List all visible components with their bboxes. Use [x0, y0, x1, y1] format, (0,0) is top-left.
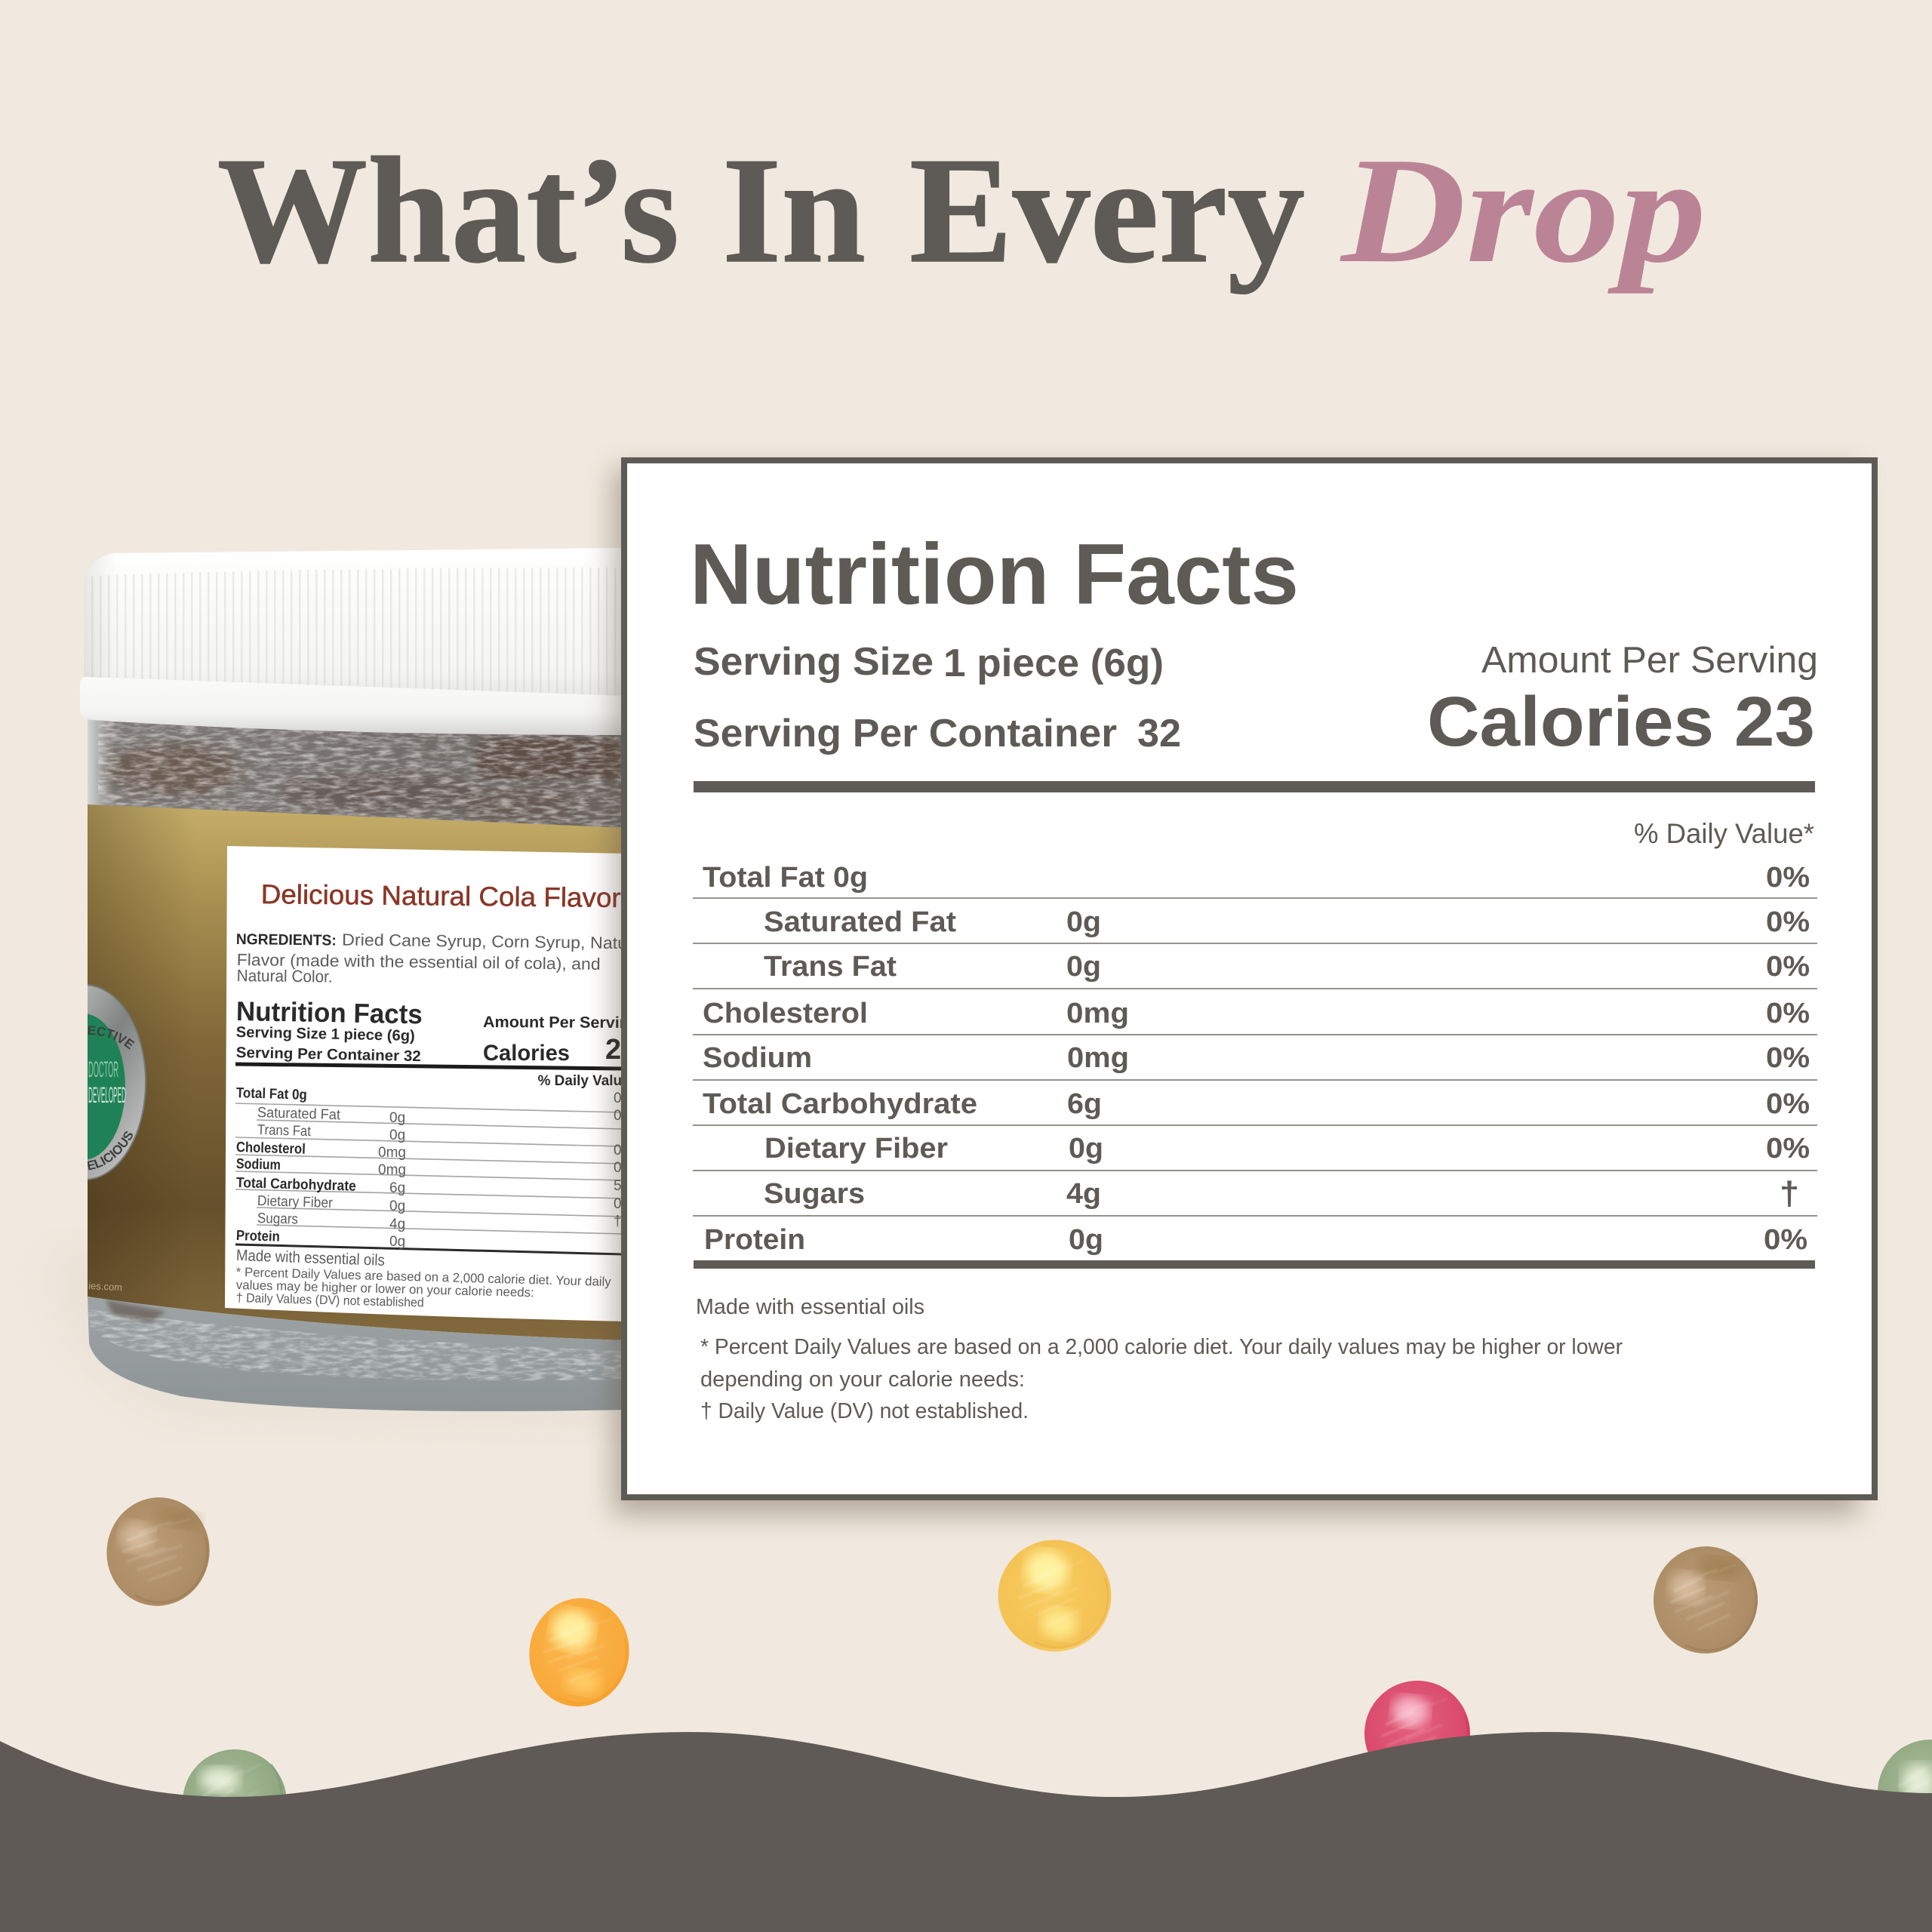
- mini nutrition facts: Nutrition Facts: [236, 995, 423, 1029]
- seal badge: EFFECTIVE: [88, 1026, 134, 1049]
- icon: candy orange: [521, 1590, 638, 1715]
- title: In: [722, 127, 866, 294]
- icon: candy yellow: [992, 1534, 1117, 1657]
- icon: candy green left: [183, 1749, 287, 1855]
- row: total fat: Total Fat 0g: [703, 862, 868, 894]
- row: protein: 0%: [1764, 1224, 1807, 1256]
- panel: nutrition facts: [624, 460, 1875, 1497]
- jar bottom: [88, 1297, 626, 1411]
- mini nutrition facts: Serving Per Container 32: [236, 1044, 421, 1065]
- row: total fat: 0%: [1766, 862, 1810, 894]
- row: dietary fiber: 0g: [1069, 1133, 1103, 1164]
- mini nutrition facts: Sugars: [257, 1211, 298, 1228]
- row: total carbohydrate: 0%: [1766, 1088, 1810, 1120]
- jar cap: [85, 548, 626, 702]
- title: [217, 127, 1706, 294]
- mini nutrition facts: % Daily Value: [538, 1073, 630, 1089]
- thick rule top: [694, 781, 1815, 792]
- mini nutrition facts: 0g: [389, 1110, 405, 1126]
- row: trans fat: [764, 951, 1810, 983]
- row: sugars: [764, 1175, 1799, 1212]
- mini nutrition facts: 0%: [614, 1108, 635, 1124]
- url on label side: ies.com: [88, 1280, 122, 1293]
- icon: candy green right: [1878, 1740, 1932, 1845]
- row: trans fat: Trans Fat: [764, 951, 897, 983]
- mini nutrition facts: 0mg: [378, 1145, 406, 1161]
- serving size: Serving Size: [694, 640, 934, 684]
- mini nutrition facts: 0mg: [378, 1162, 406, 1178]
- panel shadow: [613, 468, 1860, 1515]
- mini nutrition facts: 0%: [614, 1196, 635, 1212]
- mini nutrition facts: Trans Fat: [257, 1122, 312, 1140]
- mini nutrition facts: †: [614, 1214, 622, 1229]
- seal badge: [88, 984, 146, 1180]
- servings per container: Serving Per Container: [694, 712, 1117, 755]
- seal badge: DOCTOR: [88, 1057, 118, 1082]
- row: sodium: 0%: [1766, 1042, 1810, 1074]
- mini nutrition facts: * Percent Daily Values are based on a 2,000 calorie diet. Your daily: [236, 1265, 611, 1289]
- icon: candy brown right: [1648, 1541, 1763, 1659]
- mini nutrition facts: Saturated Fat: [257, 1105, 341, 1123]
- label heading: Delicious Natural Cola Flavor: [261, 878, 621, 913]
- ingredients: Flavor (made with the essential oil of cola), and: [237, 950, 601, 974]
- row: trans fat: 0%: [1766, 951, 1810, 983]
- serving size: [694, 640, 1164, 685]
- row: cholesterol: [703, 998, 1810, 1029]
- mini nutrition facts: values may be higher or lower on your calorie needs:: [236, 1278, 534, 1300]
- row: saturated fat: Saturated Fat: [764, 906, 956, 938]
- mini nutrition facts: Protein: [236, 1228, 280, 1245]
- gold label: [88, 804, 626, 1340]
- title: Drop: [1340, 127, 1706, 294]
- row: dietary fiber: Dietary Fiber: [764, 1133, 948, 1164]
- calories: Calories 23: [1427, 682, 1815, 761]
- mini nutrition facts: 0%: [614, 1160, 635, 1176]
- mini nutrition facts: 6g: [389, 1180, 405, 1196]
- row: saturated fat: 0%: [1766, 906, 1810, 938]
- jar shadow: [53, 1245, 626, 1426]
- panel frame: [624, 460, 1875, 1497]
- row: protein: [704, 1224, 1807, 1256]
- mini nutrition facts: 4g: [389, 1217, 405, 1232]
- row: protein: 0g: [1069, 1224, 1103, 1256]
- white back label: [225, 846, 647, 1321]
- row: sugars: 4g: [1066, 1178, 1101, 1210]
- icon: candy brown left: [98, 1489, 218, 1614]
- mini nutrition facts: Total Fat 0g: [236, 1085, 307, 1103]
- mini nutrition facts: Total Carbohydrate: [236, 1175, 356, 1195]
- row: cholesterol: 0mg: [1066, 998, 1129, 1029]
- candy window: [88, 717, 626, 830]
- title: Every: [909, 127, 1305, 294]
- mini nutrition facts: 23: [605, 1034, 637, 1066]
- mini nutrition facts: 0g: [389, 1128, 405, 1143]
- product jar: DEVELOPED: [88, 1083, 126, 1108]
- title: What’s: [217, 127, 679, 294]
- row: sodium: [703, 1042, 1810, 1074]
- heading: nutrition facts: Nutrition Facts: [690, 527, 1299, 623]
- mini nutrition facts: Amount Per Serving: [483, 1014, 639, 1032]
- mini nutrition facts: Calories: [483, 1041, 570, 1066]
- row: cholesterol: Cholesterol: [703, 998, 868, 1029]
- serving size: 1 piece (6g): [943, 641, 1164, 685]
- row: trans fat: 0g: [1066, 951, 1101, 983]
- row: total carbohydrate: [703, 1088, 1810, 1120]
- row: sodium: 0mg: [1067, 1042, 1129, 1074]
- ingredients: Dried Cane Syrup, Corn Syrup, Natural: [342, 931, 647, 952]
- mini nutrition facts: Made with essential oils: [236, 1247, 385, 1269]
- row: total carbohydrate: 6g: [1067, 1088, 1102, 1120]
- row: total carbohydrate: Total Carbohydrate: [703, 1088, 977, 1120]
- row: dietary fiber: [764, 1133, 1810, 1164]
- mini nutrition facts: † Daily Values (DV) not established: [236, 1291, 424, 1310]
- row: cholesterol: 0%: [1766, 998, 1810, 1029]
- mini nutrition facts: 0%: [614, 1091, 635, 1106]
- footnotes: Made with essential oils: [696, 1295, 924, 1319]
- ingredients: Natural Color.: [237, 966, 333, 986]
- mini nutrition facts: Serving Size 1 piece (6g): [236, 1024, 415, 1044]
- footnotes: [696, 1295, 1623, 1423]
- row: protein: Protein: [704, 1224, 805, 1256]
- footnotes: depending on your calorie needs:: [700, 1367, 1025, 1392]
- ingredients: NGREDIENTS:: [236, 931, 337, 949]
- icon: candy pink: [1359, 1675, 1475, 1792]
- row: total fat: [703, 862, 1810, 894]
- row: dietary fiber: 0%: [1766, 1133, 1810, 1164]
- row: sugars: Sugars: [764, 1178, 865, 1210]
- mini nutrition facts: [235, 995, 639, 1310]
- nutrient table: [693, 862, 1817, 1269]
- ingredients: [236, 931, 647, 986]
- product jar: [80, 548, 647, 1411]
- mini nutrition facts: 0%: [614, 1143, 635, 1158]
- footnotes: * Percent Daily Values are based on a 2,000 calorie diet. Your daily values may be higher or lower: [700, 1335, 1623, 1359]
- bottom wave: [0, 1732, 1932, 1932]
- row: sodium: Sodium: [703, 1042, 812, 1074]
- mini nutrition facts: 0g: [389, 1198, 405, 1214]
- mini nutrition facts: 5%: [614, 1178, 635, 1194]
- row: saturated fat: 0g: [1066, 906, 1101, 938]
- mini nutrition facts: Dietary Fiber: [257, 1193, 334, 1211]
- seal badge: DELICIOUS: [88, 1131, 133, 1170]
- mini nutrition facts: Cholesterol: [236, 1140, 306, 1158]
- amount per serving: Amount Per Serving: [1481, 640, 1818, 681]
- servings per container: 32: [1137, 712, 1181, 755]
- jar cap rim: [80, 677, 626, 735]
- mini nutrition facts: 0g: [389, 1234, 405, 1250]
- daily value header: % Daily Value*: [1634, 818, 1814, 849]
- mini nutrition facts: Sodium: [236, 1156, 281, 1174]
- row: saturated fat: [764, 906, 1810, 938]
- row: sugars: †: [1780, 1175, 1799, 1212]
- footnotes: † Daily Value (DV) not established.: [700, 1399, 1029, 1423]
